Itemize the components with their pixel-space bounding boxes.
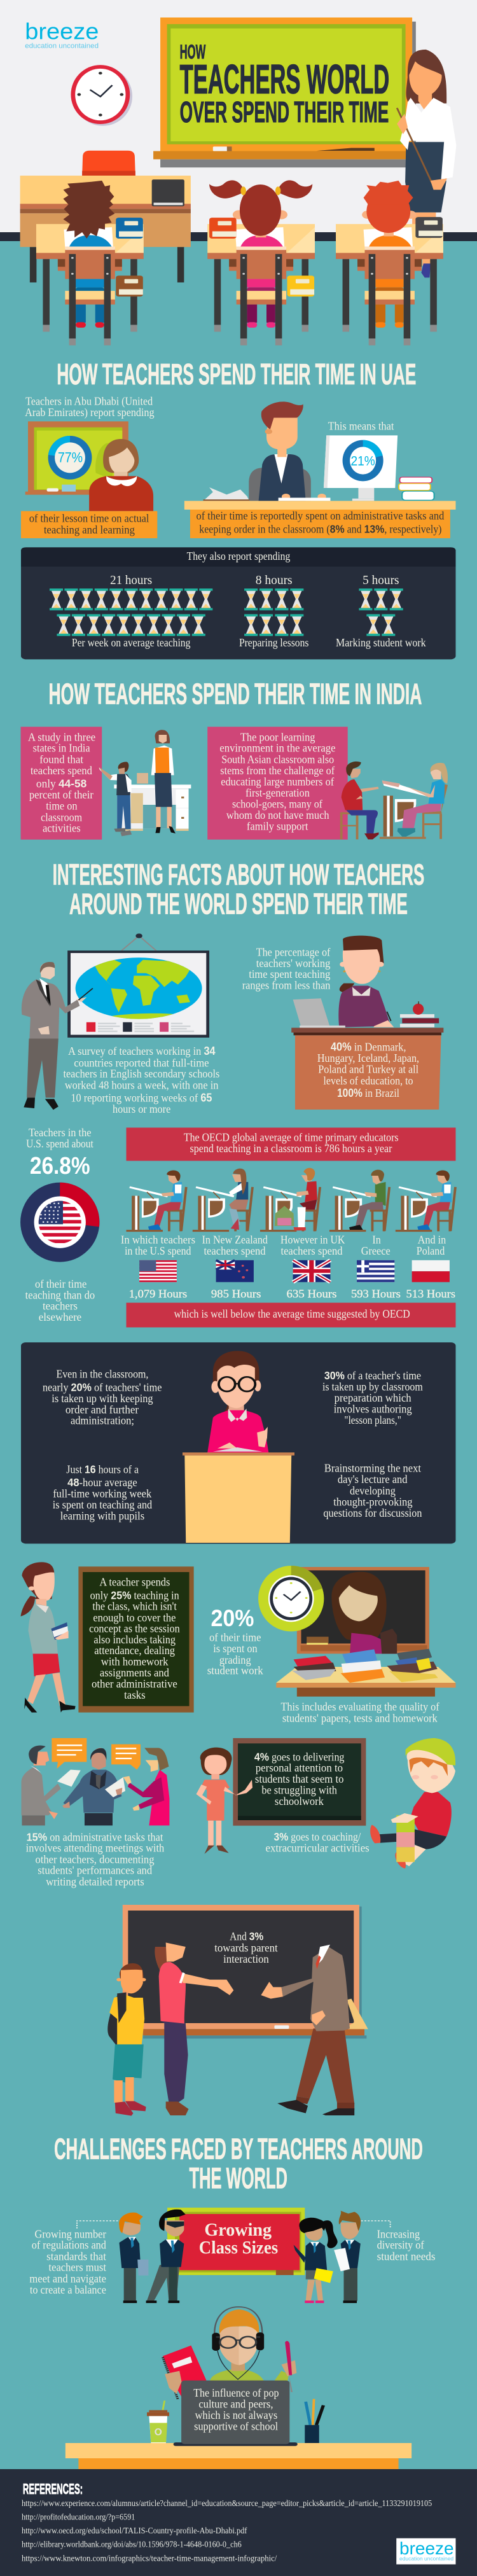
callout: poor learning environment: [207, 727, 348, 840]
panel: US 26.8 percent: 26.8%: [30, 1152, 90, 1180]
text: brainstorming: developing: [350, 1484, 396, 1497]
labels: countries: And in: [418, 1234, 446, 1246]
panel: UAE section: [21, 359, 455, 659]
panel: US 26.8 percent: of their time: [35, 1278, 86, 1290]
panel: parent interaction: [29, 1905, 435, 2303]
text: keeping order: nearly 20% of teachers' time: [43, 1381, 162, 1393]
stats: hours per year: 593 Hours: [351, 1288, 401, 1300]
heading: challenges: [54, 2133, 423, 2195]
text: keeping order: [43, 1367, 162, 1427]
board: growing class sizes: Growing: [204, 2219, 272, 2239]
panel: personal attention board: schoolwork: [275, 1795, 324, 1807]
figure: teacher with laptop: Hungary, Iceland, Japan,: [317, 1052, 419, 1064]
heading: challenges: THE WORLD: [190, 2162, 287, 2195]
labels: countries: In: [372, 1234, 381, 1246]
text: survey of teachers: teachers in English secondary schools: [63, 1068, 219, 1080]
panel: they also report spending: [21, 547, 455, 659]
figure: monitor with donut 21%: 21%: [350, 453, 375, 469]
board: growing class sizes: Class Sizes: [199, 2237, 278, 2257]
text: survey of teachers: worked 48 hours a week, with one in: [65, 1079, 218, 1092]
figure: teacher with laptop: 100% in Brazil: [337, 1087, 399, 1100]
figure: board with donut 77%: [25, 421, 128, 495]
text: evaluating quality: [280, 1700, 439, 1724]
figure: student New Zealand: [193, 1169, 252, 1232]
figure: two students at a desk: [340, 762, 448, 839]
figure: teacher with books: [21, 1562, 76, 1713]
laptop with text: [174, 2381, 298, 2446]
callout: poor learning environment: family support: [247, 819, 308, 833]
stat: 21 hours: 21 hours: [110, 573, 152, 587]
references list: http://profitofeducation.org/?p=6591: [22, 2512, 135, 2522]
text: Abu Dhabi intro: Arab Emirates) report spending: [25, 406, 154, 419]
text: brainstorming: questions for discussion: [323, 1507, 422, 1519]
text: brainstorming: [323, 1461, 422, 1519]
callout: study in three states: found that: [39, 753, 84, 765]
callout: study in three states: states in India: [33, 741, 90, 755]
banner: OECD average: [126, 1127, 455, 1161]
icon: map hanger: [121, 933, 156, 950]
text: sixteen hours: Just 16 hours of a: [66, 1463, 139, 1476]
text: regulations: to create a balance: [30, 2283, 106, 2296]
student: right: [336, 181, 443, 345]
text: sixteen hours: 48-hour average: [67, 1476, 137, 1489]
figure: student two: [146, 2210, 186, 2303]
stat: 20 percent grading: of their time: [209, 1631, 261, 1643]
callout: study in three states: only 44-58: [36, 777, 86, 790]
figure: woman teacher: [89, 439, 153, 511]
panel: India section: [21, 678, 448, 958]
connector: left dashed line: [77, 2221, 119, 2229]
panel: personal attention board: be struggling with: [261, 1783, 337, 1797]
stats: hours per year: 635 Hours: [287, 1288, 337, 1300]
figure: teacher with laptop: levels of education, to: [323, 1075, 413, 1087]
panel: other time uses: [21, 1649, 455, 1888]
background: classroom wall: [0, 0, 477, 232]
title: HOW: [180, 40, 206, 63]
stat: 21 hours: [50, 573, 212, 649]
callout: poor learning environment: environment in the average: [219, 741, 336, 755]
text: coaching: [266, 1830, 370, 1854]
figure: student US: [126, 1171, 186, 1232]
panel: personal attention board: personal attention to: [256, 1761, 343, 1774]
figure: grading board and teacher: [297, 1567, 429, 1654]
callout: poor learning environment: educating large numbers of: [221, 775, 335, 788]
stat: 20 percent grading: 20%: [211, 1605, 254, 1631]
callout: poor learning environment: stems from the challenge of: [220, 764, 335, 777]
text: keeping order: administration;: [71, 1414, 134, 1427]
callout: lesson time: [21, 511, 157, 538]
banner: below OECD: [126, 1303, 455, 1327]
panel: green chalkboard text: assignments and: [100, 1666, 169, 1679]
panel: classroom time split: [21, 1342, 455, 1713]
panel: green chalkboard text: the class, which isn't: [92, 1599, 177, 1613]
footer: references: REFERENCES:: [23, 2481, 83, 2498]
stats: hours per year: 513 Hours: [406, 1288, 455, 1300]
text: parent interaction: And 3%: [230, 1930, 263, 1942]
connector: right dashed line: [361, 2221, 391, 2229]
panel: US 26.8 percent: Teachers in the: [29, 1127, 92, 1139]
panel: personal attention board: 4% goes to delivering: [254, 1750, 344, 1763]
figure: lectern teacher: [183, 1351, 294, 1543]
labels: countries: Poland: [417, 1245, 445, 1258]
text: sixteen hours: is spent on teaching and: [53, 1498, 152, 1511]
labels: countries: Greece: [361, 1245, 391, 1258]
panel: green chalkboard text: with homework: [101, 1655, 169, 1667]
flag: New Zealand: [216, 1260, 254, 1282]
panel: green chalkboard text: only 25% teaching in: [90, 1589, 179, 1601]
text: administrative tasks: other teachers, documenting: [35, 1853, 154, 1865]
text: survey of teachers: A survey of teachers working in 34: [68, 1045, 216, 1058]
callout: lesson time: teaching and learning: [44, 523, 135, 536]
stats: hours per year: 1,079 Hours: [129, 1288, 187, 1300]
text: regulations: teachers must: [49, 2260, 107, 2274]
figure: student four: [334, 2211, 361, 2303]
panel: green chalkboard text: other administrative: [92, 1677, 177, 1690]
text: parent interaction: [214, 1930, 278, 1965]
callout: study in three states: classroom: [41, 811, 82, 823]
panel: green chalkboard text: also includes taking: [93, 1633, 176, 1646]
text: sixteen hours: full-time working week: [53, 1487, 152, 1500]
text: regulations: meet and navigate: [29, 2272, 106, 2285]
chart: world map: [67, 950, 209, 1038]
figure: teacher with laptop: [291, 936, 443, 1110]
references list: [22, 2498, 432, 2563]
figure: girl at board: [197, 1748, 252, 1854]
stats: hours per year: 985 Hours: [211, 1288, 261, 1300]
labels: countries: in the U.S spend: [125, 1245, 191, 1258]
icon: book stack: [399, 477, 434, 500]
labels: countries: [121, 1234, 446, 1258]
logo: breeze: education uncontained: [25, 42, 99, 50]
icon: pen holder: [303, 2399, 323, 2446]
references list: http://www.oecd.org/edu/school/TALIS-Country-profile-Abu-Dhabi.pdf: [22, 2526, 247, 2535]
text: sixteen hours: [53, 1463, 152, 1522]
stat: 5 hours: [336, 573, 426, 649]
figure: student one: [119, 2213, 148, 2303]
text: survey of teachers: 10 reporting working weeks of 65: [71, 1092, 212, 1104]
stat: 20 percent grading: is spent on: [213, 1642, 258, 1655]
text: classroom preparation: involves authoring: [334, 1402, 412, 1416]
stat: 5 hours: 5 hours: [363, 573, 399, 587]
labels: countries: However in UK: [280, 1234, 345, 1246]
text: survey of teachers: hours or more: [113, 1103, 170, 1116]
figure: man in grey suit: [22, 962, 93, 1110]
student: left: [36, 181, 144, 345]
panel: world facts: [20, 936, 455, 1327]
panel: US 26.8 percent: teaching than do: [25, 1289, 95, 1302]
dark panel with lectern: [21, 1342, 455, 1543]
text: administrative tasks: 15% on administrative tasks that: [27, 1830, 163, 1843]
panel: green chalkboard text: concept as the session: [89, 1622, 180, 1635]
panel: green chalkboard text: A teacher spends: [99, 1575, 170, 1589]
figure: teacher with student at desk: [99, 730, 191, 836]
text: classroom preparation: "lesson plans,": [344, 1414, 401, 1426]
flag: United Kingdom: [293, 1260, 330, 1282]
logo: breeze footer: breeze: [399, 2539, 454, 2558]
text: regulations: standards that: [46, 2250, 107, 2262]
desk: [66, 2443, 411, 2469]
laptop with text: supportive of school: [194, 2419, 278, 2432]
callout: poor learning environment: first-generation: [245, 786, 310, 799]
background: skirting stripe: [0, 232, 477, 241]
student: middle: [207, 180, 315, 345]
text: regulations: [29, 2227, 107, 2296]
figure: student Poland: [396, 1171, 455, 1232]
text: diversity: Increasing: [377, 2227, 420, 2240]
text: diversity: diversity of: [377, 2238, 424, 2252]
flag: Poland: [412, 1260, 450, 1282]
text: survey of teachers: [63, 1045, 219, 1116]
flag: Greece: [357, 1260, 394, 1282]
stat: 20 percent grading: [207, 1605, 263, 1677]
text: sixteen hours: learning with pupils: [60, 1509, 144, 1522]
stat: 8 hours: Preparing lessons: [239, 636, 308, 649]
chart: US donut: [20, 1183, 99, 1262]
text: keeping order: is taken up with keeping: [52, 1392, 153, 1405]
text: diversity: student needs: [377, 2250, 435, 2262]
references list: http://elibrary.worldbank.org/doi/abs/10.1596/978-1-4648-0160-0_ch6: [22, 2540, 242, 2549]
callout: poor learning environment: The poor learning: [240, 730, 315, 743]
callout: study in three states: teachers spend: [31, 764, 92, 777]
title: [180, 40, 389, 129]
figure: desk with book stacks: [276, 1649, 455, 1697]
stat: 20 percent grading: student work: [207, 1664, 263, 1677]
chart: clock donut 20 percent: [258, 1566, 324, 1631]
callout: poor learning environment: whom do not have much: [226, 809, 329, 821]
figure: monitor with donut 21%: [324, 435, 398, 501]
text: diversity: [377, 2227, 435, 2262]
stat: 8 hours: [239, 573, 308, 649]
text: brainstorming: thought-provoking: [333, 1495, 413, 1508]
figure: male teacher at desk: [204, 401, 330, 501]
panel: US 26.8 percent: elsewhere: [39, 1311, 81, 1324]
figure: student Greece: [329, 1170, 389, 1232]
text: brainstorming: Brainstorming the next: [324, 1461, 422, 1475]
figure: mother: [155, 1942, 233, 2115]
callout: study in three states: activities: [43, 821, 81, 835]
figure: boy with blocks: [370, 1738, 455, 1869]
panel: hero classroom: [20, 17, 456, 345]
panel: green chalkboard text: [78, 1566, 194, 1713]
text: administrative tasks: students' performances and: [38, 1863, 152, 1877]
text: percentage of teaching time: [242, 957, 330, 992]
stat: 20 percent grading: grading: [219, 1654, 251, 1666]
text: classroom preparation: [322, 1369, 423, 1426]
text: Abu Dhabi intro: Teachers in Abu Dhabi (United: [25, 394, 153, 408]
text: classroom preparation: 30% of a teacher's time: [324, 1369, 421, 1382]
figure: student with headphones: [163, 2307, 296, 2400]
laptop with text: The influence of pop: [193, 2386, 279, 2399]
icon: wall clock: [71, 65, 132, 126]
figure: teacher with laptop: 40% in Denmark,: [331, 1041, 406, 1054]
text: Abu Dhabi intro: [25, 394, 154, 419]
figure: student three: [294, 2218, 338, 2303]
figure: meeting colleagues: [21, 1738, 169, 1825]
text: coaching: 3% goes to coaching/: [273, 1830, 361, 1843]
callout: study in three states: percent of their: [29, 788, 93, 801]
text: classroom preparation: preparation which: [335, 1391, 411, 1404]
text: regulations: of regulations and: [32, 2238, 106, 2252]
labels: countries: In which teachers: [121, 1234, 195, 1246]
text: percentage of teaching time: teachers' working: [256, 957, 330, 970]
chalkboard: [153, 17, 416, 167]
labels: countries: teachers spend: [204, 1245, 266, 1258]
panel: US 26.8 percent: teachers: [43, 1300, 78, 1312]
panel: US 26.8 percent: [20, 1127, 99, 1324]
chalkboard: [123, 1905, 368, 2038]
figure: boy with backpack: [107, 1963, 146, 2116]
panel: personal attention board: [233, 1738, 366, 1826]
banner: OECD average: The OECD global average of time primary educators: [184, 1131, 399, 1144]
teacher desk: [20, 151, 191, 282]
banner: OECD average: spend teaching in a classroom is 786 hours a year: [190, 1142, 392, 1155]
callout: poor learning environment: South Asian classroom also: [221, 753, 334, 765]
callout: study in three states: time on: [46, 799, 77, 812]
panel: influence of pop culture: [0, 2307, 477, 2576]
figure: teacher with laptop: Poland and Turkey at all: [318, 1063, 418, 1076]
text: keeping order: order and further: [66, 1403, 139, 1416]
panel: US 26.8 percent: U.S. spend about: [26, 1138, 93, 1150]
figure: board with donut 77%: 77%: [58, 449, 83, 466]
references list: https://www.knewton.com/infographics/teacher-time-management-infographic/: [22, 2553, 277, 2563]
text: regulations: Growing number: [35, 2227, 106, 2240]
text: percentage of teaching time: ranges from less than: [242, 979, 330, 992]
logo: breeze footer: education uncontained: [399, 2556, 453, 2562]
callout: poor learning environment: school-goers, many of: [232, 797, 322, 811]
text: percentage first line: The percentage of: [256, 945, 331, 958]
text: percentage of teaching time: time spent teaching: [249, 968, 330, 980]
panel: green chalkboard text: attendance, dealing: [94, 1644, 175, 1657]
laptop with text: which is not always: [195, 2409, 277, 2421]
text: keeping order: Even in the classroom,: [56, 1367, 148, 1381]
stat: 21 hours: Per week on average teaching: [72, 636, 190, 649]
stat: 8 hours: 8 hours: [256, 573, 293, 587]
desk with callout: administrative tasks: [184, 501, 455, 538]
text: parent interaction: towards parent: [214, 1941, 278, 1954]
footer: references: [0, 2469, 477, 2576]
panel heading: They also report spending: [187, 550, 290, 562]
logo: breeze footer: [396, 2538, 455, 2565]
figure: student UK: [260, 1168, 320, 1232]
panel: green chalkboard text: tasks: [124, 1688, 146, 1701]
heading: interesting facts: [53, 859, 424, 921]
panel: green chalkboard text: enough to cover the: [93, 1611, 176, 1624]
callout: study in three states: [21, 727, 102, 840]
panel: personal attention board: students that seem to: [255, 1772, 343, 1785]
text: parent interaction: interaction: [223, 1953, 269, 1965]
text: administrative tasks: writing detailed reports: [46, 1875, 144, 1888]
stats: hours per year: [129, 1288, 455, 1300]
text: administrative tasks: involves attending meetings with: [26, 1841, 164, 1855]
logo: breeze: breeze: [25, 18, 99, 44]
figure: father: [261, 1945, 354, 2115]
text: survey of teachers: countries reported that full-time: [74, 1057, 209, 1069]
icon: coffee cup: [147, 2400, 169, 2446]
board: growing class sizes: [167, 2208, 305, 2275]
text: this means that: This means that: [328, 419, 394, 432]
text: administrative tasks: [26, 1830, 164, 1888]
figure: teacher at board: [397, 50, 456, 277]
text: coaching: extracurricular activities: [266, 1841, 370, 1854]
flag: USA: [139, 1260, 177, 1282]
laptop with text: culture and peers,: [198, 2397, 273, 2410]
text: brainstorming: day's lecture and: [338, 1473, 407, 1486]
callout: study in three states: A study in three: [28, 730, 95, 743]
labels: countries: teachers spend: [280, 1245, 343, 1258]
labels: countries: In New Zealand: [202, 1234, 268, 1246]
callout: lesson time: of their lesson time on actual: [29, 512, 149, 525]
desk with callout: administrative tasks: keeping order in the classroom (8% and 13%, respectively): [199, 522, 441, 535]
logo: breeze: [25, 18, 99, 50]
